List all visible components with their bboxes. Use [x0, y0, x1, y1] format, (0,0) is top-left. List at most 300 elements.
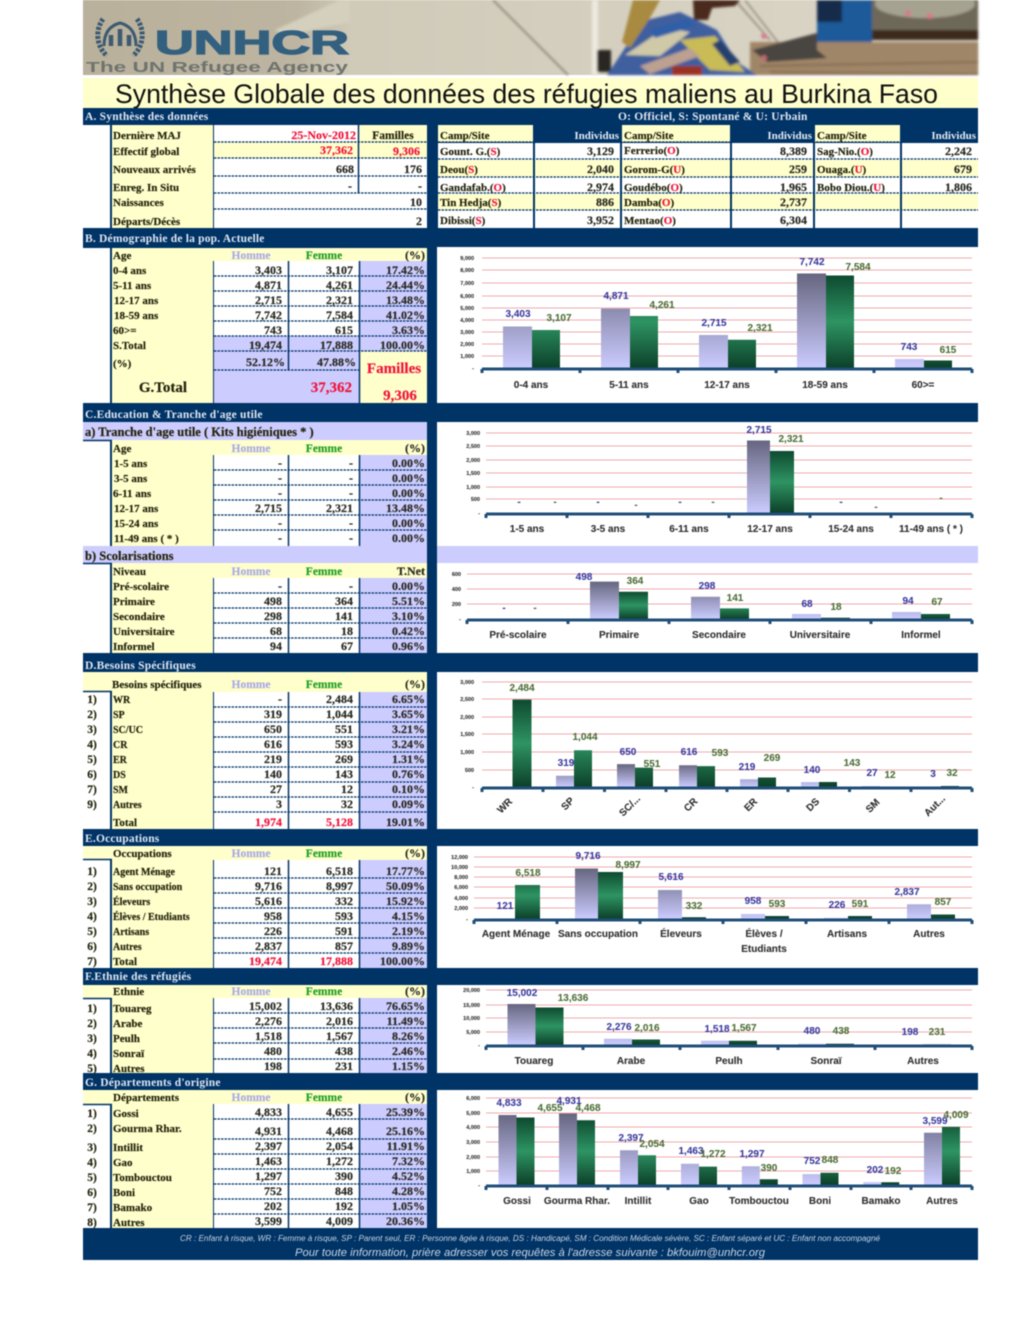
- bar chart: C b) schooling: -: [502, 603, 506, 614]
- panel: D specific needs table: Autres: [113, 800, 142, 811]
- panel: C a) useful age bracket table: -: [278, 486, 282, 500]
- panel: C b) schooling table: Primaire: [113, 596, 155, 608]
- bar chart: C b) schooling: Pré-scolaire: [489, 630, 547, 641]
- panel: A camps and sites table: Sag-Nio.(O): [817, 146, 873, 158]
- bar chart: F ethnicity: 15,002: [507, 988, 538, 999]
- panel: C b) schooling table: [83, 546, 427, 653]
- panel: F ethnicity table: 8.26%: [392, 1029, 425, 1043]
- panel: A camps and sites table: 886: [596, 195, 614, 209]
- bar chart: C b) schooling: 298: [699, 581, 716, 592]
- bar chart: E occupations: 8,000: [454, 875, 468, 881]
- panel: F ethnicity table: 4): [87, 1048, 97, 1060]
- panel: G departments table: 192: [335, 1199, 353, 1213]
- panel: F ethnicity table: 76.65%: [386, 999, 425, 1013]
- panel: E occupations table: 857: [335, 939, 353, 953]
- panel: D specific needs table: 3: [276, 797, 282, 811]
- panel: E occupations table: 9,716: [255, 879, 282, 893]
- panel: C a) useful age bracket table: 0.00%: [392, 486, 425, 500]
- panel: G departments table: 4,833: [255, 1105, 282, 1119]
- panel: E occupations table: Élèves / Etudiants: [113, 911, 190, 923]
- bar chart: F ethnicity: Touareg: [515, 1056, 553, 1067]
- bar chart: E occupations: Sans occupation: [558, 929, 638, 940]
- panel: A camps and sites table: [438, 125, 978, 228]
- bar chart: G departments: 4,000: [466, 1125, 480, 1131]
- panel: D specific needs table: SP: [113, 710, 125, 721]
- panel: G departments table: Gossi: [113, 1108, 139, 1120]
- panel: A summary table: Dernière MAJ: [113, 130, 181, 142]
- panel: A summary table: Naissances: [113, 197, 164, 209]
- bar chart: F ethnicity: 480: [804, 1026, 821, 1037]
- panel: C b) schooling table: 298: [264, 609, 282, 623]
- panel: A summary table: Enreg. In Situ: [113, 182, 179, 194]
- panel: G departments table: 5): [87, 1172, 97, 1184]
- panel: B demography table: 3,107: [326, 263, 353, 277]
- panel: E occupations table: 19,474: [249, 954, 282, 968]
- panel: F ethnicity table: Autres: [113, 1063, 145, 1075]
- panel: F ethnicity table: Homme: [232, 986, 270, 998]
- panel: D specific needs table: 319: [264, 707, 282, 721]
- panel: D specific needs table: ER: [113, 755, 128, 766]
- bar chart: B demography: 12-17 ans: [704, 380, 750, 391]
- bar chart: F ethnicity: 1,518: [704, 1024, 730, 1035]
- panel: C a) useful age bracket table: 0.00%: [392, 531, 425, 545]
- bar chart: G departments: 848: [822, 1155, 839, 1166]
- bar chart: E occupations: 5,616: [658, 872, 684, 883]
- bar chart: D specific needs: 269: [764, 753, 781, 764]
- bar chart: C a) useful age bracket: 3,000: [466, 431, 480, 437]
- bar chart: B demography: 6,000: [460, 294, 474, 300]
- panel: D specific needs table: 650: [264, 722, 282, 736]
- bar chart: G departments: 6,000: [466, 1096, 480, 1102]
- panel: B demography table: 37,362: [311, 380, 352, 396]
- panel: C a) useful age bracket table: 0.00%: [392, 471, 425, 485]
- panel: G departments table: 20.36%: [386, 1214, 425, 1228]
- bar chart: B demography: 615: [940, 345, 957, 356]
- panel: A summary table: Départs/Décès: [113, 216, 181, 228]
- bar chart: D specific needs: 32: [946, 768, 958, 779]
- panel: D specific needs table: 6.65%: [392, 692, 425, 706]
- bar chart: D specific needs: 593: [712, 748, 729, 759]
- panel: E occupations table: Femme: [306, 848, 342, 860]
- panel: C a) useful age bracket table: -: [349, 516, 353, 530]
- logo tagline: The UN Refugee Agency: [86, 59, 349, 76]
- bar chart: B demography: 18-59 ans: [802, 380, 848, 391]
- panel: D specific needs table: 5,128: [326, 815, 353, 829]
- panel: C b) schooling table: -: [349, 579, 353, 593]
- bar chart: C b) schooling: 18: [830, 602, 842, 613]
- panel: G departments table: 1.05%: [392, 1199, 425, 1213]
- bar chart: F ethnicity: 10,000: [463, 1016, 480, 1022]
- bar chart: B demography: 4,871: [603, 291, 629, 302]
- panel: G departments table: (%): [405, 1090, 425, 1104]
- title: Synthèse Globale des données des réfugies maliens au Burkina Faso: [115, 79, 938, 109]
- panel: E occupations table: 17.77%: [386, 864, 425, 878]
- panel: A camps and sites table: Gorom-G(U): [624, 164, 685, 176]
- panel: E occupations table: 958: [264, 909, 282, 923]
- bar chart: C a) useful age bracket: -: [478, 511, 480, 517]
- panel: A summary table: 9,306: [393, 144, 420, 158]
- bar chart: B demography: 8,000: [460, 268, 474, 274]
- bar chart: E occupations: [437, 846, 978, 968]
- panel: D specific needs table: Total: [113, 817, 137, 829]
- bar chart: B demography: 7,742: [799, 257, 825, 268]
- panel: A camps and sites table: Gandafab.(O): [440, 182, 506, 194]
- bar chart: D specific needs: WR: [495, 796, 516, 816]
- bar chart: E occupations: 332: [686, 901, 703, 912]
- panel: E occupations table: Agent Ménage: [113, 867, 175, 878]
- footer notes: CR : Enfant à risque, WR : Femme à risque, SP : Parent seul, ER : Personne âgée à risque, DS : Handicapé, SM : Condition Médicale sévère, SC : Enfant séparé et UC : Enfant non accompagné: [180, 1234, 881, 1243]
- bar chart: G departments: 3,599: [922, 1116, 948, 1127]
- panel: F ethnicity table: Sonraï: [113, 1048, 145, 1060]
- panel: C a) useful age bracket table: Age: [113, 443, 131, 455]
- bar chart: G departments: 4,655: [537, 1103, 563, 1114]
- bar chart: C a) useful age bracket: 15-24 ans: [828, 524, 874, 535]
- panel: D specific needs table: 0.09%: [392, 797, 425, 811]
- panel: E occupations table: 50.09%: [386, 879, 425, 893]
- panel: D specific needs table: 1): [87, 694, 97, 706]
- panel: D specific needs table: SM: [113, 785, 129, 796]
- panel: C a) useful age bracket table: -: [349, 531, 353, 545]
- panel: D specific needs table: [83, 672, 427, 829]
- panel: E occupations table: 15.92%: [386, 894, 425, 908]
- panel: D specific needs table: 4): [87, 739, 97, 751]
- panel: G departments table: 1,463: [255, 1154, 282, 1168]
- panel: B demography table: 7,584: [326, 308, 353, 322]
- panel: D specific needs table: 6): [87, 769, 97, 781]
- panel: C a) useful age bracket table: Homme: [232, 443, 270, 455]
- panel: B demography table: 52.12%: [246, 355, 285, 369]
- panel: B demography table: Familles: [367, 361, 421, 377]
- panel: A camps and sites table: Ferrerio(O): [624, 145, 680, 157]
- bar chart: F ethnicity: Autres: [907, 1056, 939, 1067]
- bar chart: C a) useful age bracket: 1,500: [466, 471, 480, 477]
- bar chart: G departments: 1,297: [739, 1149, 765, 1160]
- panel: G departments table: [83, 1090, 427, 1229]
- panel: B demography table: 4,261: [326, 278, 353, 292]
- panel: D specific needs table: (%): [405, 677, 425, 691]
- bar chart: C a) useful age bracket: -: [711, 497, 715, 508]
- panel: C a) useful age bracket table: -: [278, 471, 282, 485]
- panel: C a) useful age bracket table: -: [278, 516, 282, 530]
- bar chart: F ethnicity: Sonraï: [810, 1056, 842, 1067]
- panel: E occupations table: 4.15%: [392, 909, 425, 923]
- bar chart: G departments: 4,931: [556, 1096, 582, 1107]
- bar chart: C a) useful age bracket: -: [678, 497, 682, 508]
- panel: F ethnicity table: Femme: [306, 986, 342, 998]
- bar chart: G departments: 5,000: [466, 1111, 480, 1117]
- panel: G departments table: 202: [264, 1199, 282, 1213]
- bar chart: E occupations: 591: [852, 899, 869, 910]
- panel: C b) schooling table: Niveau: [113, 566, 146, 578]
- panel: E occupations table: Homme: [232, 848, 270, 860]
- bar chart: B demography: 5-11 ans: [609, 380, 649, 391]
- bar chart: B demography: [437, 247, 978, 403]
- panel: G departments table: 1,297: [255, 1169, 282, 1183]
- panel: D specific needs table: 269: [335, 752, 353, 766]
- panel: D specific needs table: 1.31%: [392, 752, 425, 766]
- bar chart: G departments: 390: [761, 1163, 778, 1174]
- bar chart: F ethnicity: 20,000: [463, 988, 480, 994]
- bar chart: F ethnicity: 231: [929, 1027, 946, 1038]
- panel: D specific needs table: 593: [335, 737, 353, 751]
- panel: A summary table: Effectif global: [113, 146, 179, 158]
- panel: A summary table: 2: [416, 214, 422, 228]
- panel: A camps and sites table: Camp/Site: [624, 130, 674, 142]
- panel: A summary table: [83, 125, 427, 228]
- bar chart: E occupations: 2,000: [454, 906, 468, 912]
- bar chart: D specific needs: CR: [682, 796, 701, 814]
- panel: D specific needs table: 1,044: [326, 707, 353, 721]
- bar chart: D specific needs: SP: [560, 795, 577, 813]
- bar chart: C b) schooling: Informel: [901, 630, 941, 641]
- panel: D specific needs table: SC/UC: [113, 725, 143, 736]
- panel: B demography table: 615: [335, 323, 353, 337]
- panel: A summary table: -: [418, 179, 422, 193]
- panel: D specific needs table: 2): [87, 709, 97, 721]
- panel: A camps and sites table: 1,806: [945, 180, 972, 194]
- bar chart: C b) schooling: 364: [627, 576, 644, 587]
- bar chart: G departments: 1,000: [466, 1169, 480, 1175]
- bar chart: D specific needs: 12: [884, 770, 896, 781]
- bar chart: G departments: Gao: [689, 1196, 709, 1207]
- panel: E occupations table: (%): [405, 846, 425, 860]
- bar chart: E occupations: 12,000: [451, 855, 468, 861]
- panel: C b) schooling table: 498: [264, 594, 282, 608]
- panel: B demography table: 60>=: [113, 325, 137, 337]
- panel: C b) schooling table: Femme: [306, 566, 342, 578]
- panel: E occupations table: 8,997: [326, 879, 353, 893]
- panel: E occupations table: 226: [264, 924, 282, 938]
- panel: B demography table: 0-4 ans: [113, 265, 147, 277]
- bar chart: E occupations: -: [466, 917, 468, 923]
- bar chart: G departments: -: [478, 1183, 480, 1189]
- panel: A summary table: 668: [336, 162, 354, 176]
- panel: E occupations table: 4): [87, 911, 97, 923]
- panel: C a) useful age bracket table: 2,715: [255, 501, 282, 515]
- panel: B demography table: 19,474: [249, 338, 282, 352]
- panel: E occupations table: Occupations: [113, 848, 172, 860]
- bar chart: G departments: Bamako: [862, 1196, 900, 1207]
- panel: G departments table: Intillit: [113, 1142, 143, 1154]
- bar chart: C a) useful age bracket: 11-49 ans ( * ): [899, 524, 963, 535]
- bar chart: F ethnicity: Peulh: [715, 1056, 743, 1067]
- panel: F ethnicity table: 231: [335, 1059, 353, 1073]
- panel: C a) useful age bracket table: [83, 422, 427, 546]
- bar chart: G departments: Autres: [926, 1196, 958, 1207]
- panel: F ethnicity table: 1.15%: [392, 1059, 425, 1073]
- bar chart: D specific needs: SM: [864, 797, 882, 815]
- panel: E occupations table: 6,518: [326, 864, 353, 878]
- bar chart: C b) schooling: Universitaire: [790, 630, 851, 641]
- bar chart: C b) schooling: [437, 546, 978, 653]
- panel: A summary table: 25-Nov-2012: [291, 128, 356, 142]
- bar chart: C a) useful age bracket: 2,000: [466, 458, 480, 464]
- panel: C b) schooling table: 68: [270, 624, 282, 638]
- panel: B demography table: 47.88%: [317, 355, 356, 369]
- panel: D specific needs table: -: [278, 692, 282, 706]
- bar chart: G departments: 2,000: [466, 1155, 480, 1161]
- bar chart: D specific needs: 3: [930, 769, 936, 780]
- panel: B demography table: 17.42%: [386, 263, 425, 277]
- panel: C a) useful age bracket table: 3-5 ans: [114, 473, 148, 485]
- bar chart: D specific needs: [437, 672, 978, 829]
- panel: G departments table: Boni: [113, 1187, 135, 1199]
- panel: A camps and sites table: Mentao(O): [624, 215, 676, 227]
- bar chart: C a) useful age bracket: 2,321: [778, 434, 804, 445]
- bar chart: C b) schooling: Primaire: [599, 630, 639, 641]
- panel: C a) useful age bracket table: a) Tranche d'age utile ( Kits higiéniques * ): [85, 425, 314, 439]
- bar chart: G departments: 4,009: [943, 1110, 969, 1121]
- panel: B demography table: 743: [264, 323, 282, 337]
- section C heading: C.Education & Tranche d'age utile: [85, 409, 263, 421]
- panel: F ethnicity table: [83, 984, 427, 1075]
- bar chart: E occupations: 226: [829, 900, 846, 911]
- panel: E occupations table: Sans occupation: [113, 882, 183, 893]
- panel: C a) useful age bracket table: 1-5 ans: [114, 458, 148, 470]
- bar chart: D specific needs: 551: [644, 759, 661, 770]
- panel: C b) schooling table: Secondaire: [113, 611, 165, 623]
- section E heading: E.Occupations: [85, 833, 160, 845]
- bar chart: F ethnicity: 15,000: [463, 1003, 480, 1009]
- panel: G departments table: 4,009: [326, 1214, 353, 1228]
- panel: C a) useful age bracket table: -: [278, 456, 282, 470]
- bar chart: C a) useful age bracket: 2,715: [746, 425, 772, 436]
- bar chart: G departments: 192: [885, 1166, 902, 1177]
- panel: B demography table: 100.00%: [380, 338, 425, 352]
- panel: E occupations table: 121: [264, 864, 282, 878]
- panel: G departments table: 25.39%: [386, 1105, 425, 1119]
- panel: C b) schooling table: 94: [270, 639, 282, 653]
- panel: A camps and sites table: 2,974: [587, 180, 614, 194]
- bar chart: E occupations: 857: [935, 897, 952, 908]
- panel: C b) schooling table: 364: [335, 594, 353, 608]
- panel: D specific needs table: 551: [335, 722, 353, 736]
- panel: B demography table: [83, 248, 427, 404]
- panel: C a) useful age bracket table: -: [349, 471, 353, 485]
- panel: F ethnicity table: 198: [264, 1059, 282, 1073]
- panel: G departments table: 4): [87, 1157, 97, 1169]
- panel: B demography table: 9,306: [383, 388, 417, 404]
- panel: D specific needs table: 1,974: [255, 815, 282, 829]
- panel: A camps and sites table: 2,737: [780, 195, 807, 209]
- panel: F ethnicity table: 5): [87, 1063, 97, 1075]
- panel: D specific needs table: Besoins spécifiques: [112, 679, 202, 691]
- panel: G departments table: 2): [87, 1123, 97, 1135]
- panel: G departments table: 25.16%: [386, 1124, 425, 1138]
- panel: G departments table: Bamako: [113, 1202, 153, 1214]
- panel: G departments table: 2,397: [255, 1139, 282, 1153]
- panel: D specific needs table: Homme: [232, 679, 270, 691]
- panel: C a) useful age bracket table: 6-11 ans: [113, 488, 152, 500]
- panel: E occupations table: 9.89%: [392, 939, 425, 953]
- bar chart: C b) schooling: 498: [576, 572, 593, 583]
- panel: C a) useful age bracket table: 12-17 ans: [114, 503, 159, 515]
- panel: G departments table: 7): [87, 1202, 97, 1214]
- panel: B demography table: Homme: [232, 250, 270, 262]
- bar chart: D specific needs: 2,000: [460, 715, 474, 721]
- panel: A camps and sites table: Goudébo(O): [624, 182, 683, 194]
- bar chart: D specific needs: -: [472, 785, 474, 791]
- panel: C a) useful age bracket table: 2,321: [326, 501, 353, 515]
- panel: C b) schooling table: T.Net: [397, 564, 425, 578]
- panel: E occupations table: [83, 846, 427, 968]
- panel: D specific needs table: 140: [264, 767, 282, 781]
- panel: D specific needs table: 19.01%: [386, 815, 425, 829]
- bar chart: G departments: 3,000: [466, 1140, 480, 1146]
- bar chart: B demography: 743: [901, 342, 918, 353]
- bar chart: D specific needs: 2,500: [460, 697, 474, 703]
- panel: A camps and sites table: Tin Hedja(S): [440, 197, 502, 209]
- bar chart: C b) schooling: 600: [452, 572, 461, 578]
- bar chart: B demography: 9,000: [460, 256, 474, 262]
- bar chart: D specific needs: SC/...: [617, 793, 643, 819]
- panel: E occupations table: Total: [113, 956, 137, 968]
- panel: F ethnicity table: 1,518: [255, 1029, 282, 1043]
- bar chart: D specific needs: 3,000: [460, 680, 474, 686]
- panel: F ethnicity table: Touareg: [113, 1003, 152, 1015]
- panel: G departments table: 1,272: [326, 1154, 353, 1168]
- panel: B demography table: 13.48%: [386, 293, 425, 307]
- bar chart: D specific needs: 27: [866, 768, 878, 779]
- panel: F ethnicity table: 480: [264, 1044, 282, 1058]
- bar chart: F ethnicity: 2,276: [606, 1022, 632, 1033]
- bar chart: F ethnicity: 1,567: [731, 1023, 757, 1034]
- bar chart: F ethnicity: 438: [833, 1026, 850, 1037]
- panel: B demography table: 3,403: [255, 263, 282, 277]
- bar chart: G departments: Boni: [809, 1196, 831, 1207]
- panel: A camps and sites table: Ouaga.(U): [817, 164, 867, 176]
- panel: F ethnicity table: 11.49%: [387, 1014, 425, 1028]
- panel: G departments table: 4,931: [255, 1124, 282, 1138]
- panel: G departments table: 752: [264, 1184, 282, 1198]
- panel: E occupations table: 591: [335, 924, 353, 938]
- bar chart: F ethnicity: 13,636: [558, 993, 589, 1004]
- panel: G departments table: 6): [87, 1187, 97, 1199]
- panel: G departments table: 848: [335, 1184, 353, 1198]
- panel: A camps and sites table: 2,040: [587, 162, 614, 176]
- panel: G departments table: Gourma Rhar.: [113, 1123, 182, 1135]
- bar chart: C b) schooling: -: [459, 617, 461, 623]
- panel: C a) useful age bracket table: (%): [405, 441, 425, 455]
- panel: F ethnicity table: Arabe: [113, 1018, 142, 1030]
- bar chart: B demography: 4,261: [649, 300, 675, 311]
- bar chart: C a) useful age bracket: -: [553, 497, 557, 508]
- bar chart: B demography: 3,000: [460, 330, 474, 336]
- panel: D specific needs table: 5): [87, 754, 97, 766]
- bar chart: E occupations: 4,000: [454, 896, 468, 902]
- footer notes: Pour toute information, prière adresser vos requêtes à l'adresse suivante : bkfouim@unhcr.org: [295, 1247, 766, 1259]
- bar chart: E occupations: 6,518: [515, 868, 541, 879]
- panel: E occupations table: 2,837: [255, 939, 282, 953]
- panel: A camps and sites table: 259: [789, 162, 807, 176]
- panel: F ethnicity table: 2,016: [326, 1014, 353, 1028]
- bar chart: E occupations: Etudiants: [741, 944, 787, 955]
- section B heading: B. Démographie de la pop. Actuelle: [85, 233, 265, 245]
- panel: G departments table: Gao: [113, 1157, 133, 1169]
- bar chart: G departments: Tombouctou: [729, 1196, 789, 1207]
- panel: A summary table: 176: [404, 162, 422, 176]
- panel: D specific needs table: WR: [113, 695, 131, 706]
- bar chart: B demography: 7,584: [845, 262, 871, 273]
- panel: D specific needs table: Femme: [306, 679, 342, 691]
- panel: F ethnicity table: Ethnie: [113, 986, 144, 998]
- section A heading: O: Officiel, S: Spontané & U: Urbain: [618, 111, 808, 123]
- bar chart: G departments: Gossi: [503, 1196, 531, 1207]
- bar chart: E occupations: 2,837: [894, 887, 920, 898]
- panel: D specific needs table: 3.65%: [392, 707, 425, 721]
- panel: E occupations table: 100.00%: [380, 954, 425, 968]
- panel: C b) schooling table: -: [278, 579, 282, 593]
